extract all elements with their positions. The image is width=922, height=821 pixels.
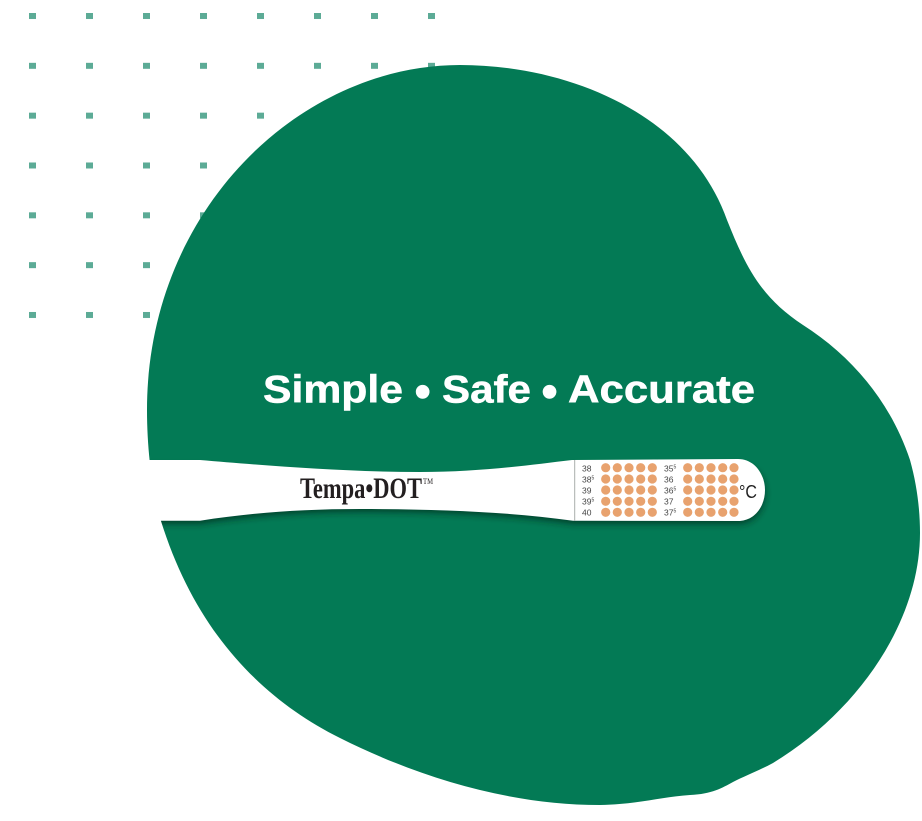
trademark: TM xyxy=(423,477,433,486)
degree unit: °C xyxy=(739,482,757,502)
scale labels right: 5 xyxy=(673,508,676,514)
scale labels left: 38 xyxy=(582,474,591,484)
heading: Safe xyxy=(442,368,531,412)
scale labels right xyxy=(664,464,676,518)
strip shadow xyxy=(140,465,765,524)
scale labels right: 37 xyxy=(664,508,673,518)
scale labels right: 36 xyxy=(664,486,673,496)
scale labels left: 39 xyxy=(582,486,592,496)
scale labels left: 5 xyxy=(591,476,594,482)
strip body xyxy=(140,459,765,521)
scale labels left xyxy=(582,464,594,518)
indicator dots right xyxy=(683,463,739,517)
scale labels left: 5 xyxy=(591,498,594,504)
scale labels right: 5 xyxy=(673,486,676,492)
heading: Simple xyxy=(263,368,403,412)
heading xyxy=(263,365,755,417)
green blob xyxy=(147,65,920,805)
divider xyxy=(574,460,576,521)
dot grid xyxy=(29,13,436,319)
scale labels right: 36 xyxy=(664,474,674,484)
indicator dots left xyxy=(601,463,657,517)
scale labels right: 5 xyxy=(673,464,676,470)
scale labels left: 40 xyxy=(582,508,592,518)
heading: • xyxy=(541,365,558,417)
heading: • xyxy=(415,365,431,417)
scale labels left: 39 xyxy=(582,496,591,506)
brand name: Tempa•DOT xyxy=(300,472,422,505)
thermometer strip xyxy=(140,459,765,521)
scale labels right: 37 xyxy=(664,496,674,506)
scale labels right: 35 xyxy=(664,464,673,474)
heading: Accurate xyxy=(568,368,755,412)
scale labels left: 38 xyxy=(582,464,592,474)
